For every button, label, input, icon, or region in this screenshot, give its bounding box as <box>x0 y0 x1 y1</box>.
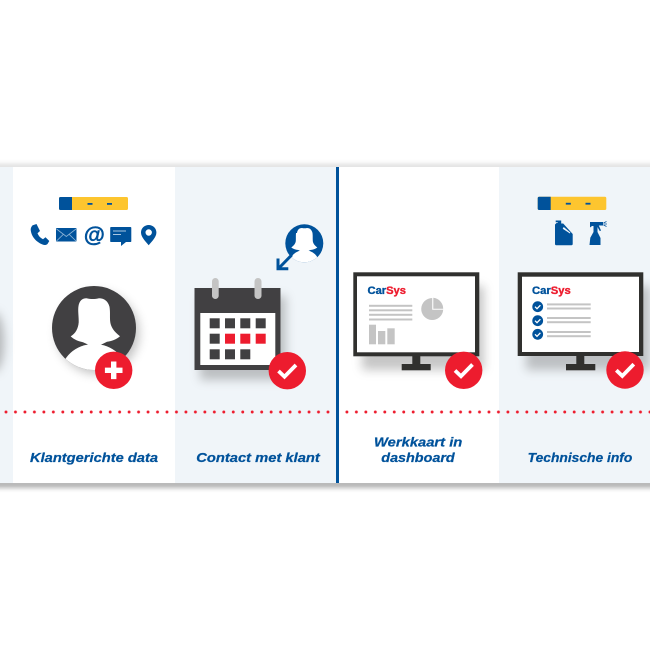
label: Contact met klant <box>196 450 321 465</box>
pie chart <box>421 298 443 320</box>
badge: check <box>606 351 644 389</box>
badge: check <box>445 352 482 389</box>
icon: phone <box>31 224 49 245</box>
icon: monitor with checklist <box>518 272 650 370</box>
icon: person with plus badge <box>52 286 139 404</box>
badge: plus <box>95 352 132 389</box>
logo: CarSys: CarSys <box>532 285 571 297</box>
label: dashboard <box>381 450 456 465</box>
logo: CarSys: CarSys <box>368 285 406 297</box>
badge: check <box>269 352 306 389</box>
label <box>374 434 462 465</box>
icon: yellow key <box>538 197 606 210</box>
checklist <box>532 301 591 340</box>
dotted red timeline <box>0 408 650 416</box>
panel: werkkaart in dashboard <box>353 272 484 465</box>
panel: technische info <box>518 197 650 465</box>
band shadow <box>0 164 650 488</box>
bar chart <box>369 325 395 344</box>
icon: calendar <box>194 278 286 380</box>
panel: contact met klant <box>194 224 323 465</box>
icon: small person with arrow <box>276 224 324 270</box>
panel: klantgerichte data <box>30 197 158 465</box>
icon: monitor with dashboard <box>353 272 484 370</box>
icon: map pin <box>141 225 156 245</box>
label: Technische info <box>528 450 632 465</box>
icon: oil bottle <box>555 220 573 245</box>
icon: spray bottle <box>590 222 607 245</box>
label: Klantgerichte data <box>30 450 158 465</box>
icon: chat bubble <box>110 227 131 246</box>
icon: envelope <box>56 228 76 242</box>
divider: blue vertical line <box>336 167 339 483</box>
icon: yellow key <box>59 197 128 210</box>
label: Werkkaart in <box>374 434 462 450</box>
text lines <box>369 305 412 320</box>
icons: contact channels <box>31 223 156 247</box>
icon: at sign: @ <box>84 223 104 247</box>
panel backgrounds <box>0 167 650 483</box>
